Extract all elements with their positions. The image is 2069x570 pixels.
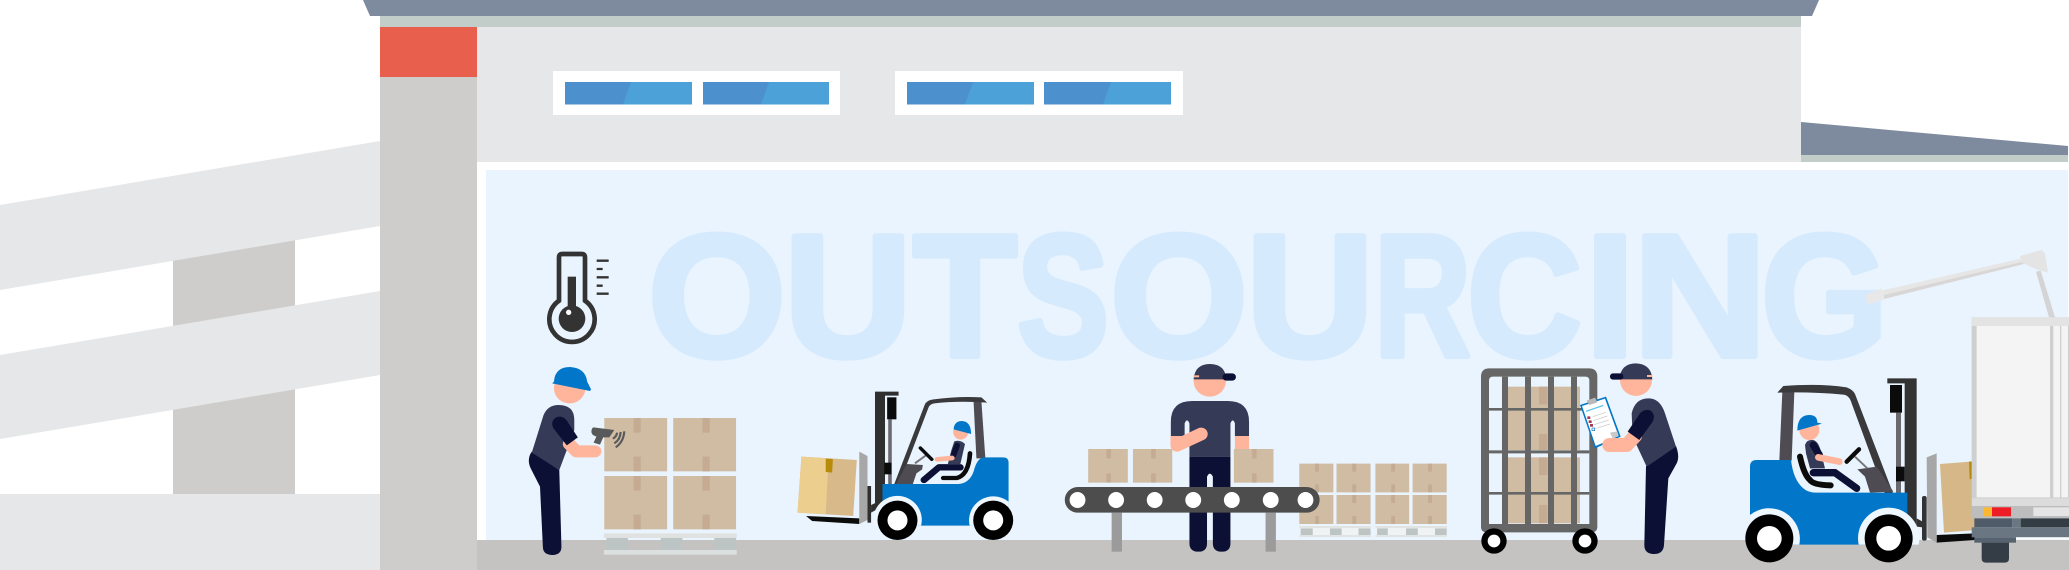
clipboard: [1580, 397, 1621, 448]
delivery truck rear: [1972, 317, 2069, 563]
red pillar cap: [380, 27, 477, 77]
cap: [1619, 363, 1652, 379]
frame: [1481, 368, 1597, 532]
torso: [532, 405, 574, 470]
cardboard box: [797, 457, 857, 516]
forearm: [569, 444, 595, 451]
hard hat: [552, 367, 591, 391]
side roof: [1801, 122, 2068, 155]
floor: [477, 540, 2069, 570]
legs: [1189, 457, 1230, 552]
worker with barcode scanner: [529, 367, 624, 555]
scanner: [591, 427, 624, 447]
title: OUTSOURCING: T: [913, 198, 1017, 393]
forklift carrying a box: [797, 392, 1013, 540]
conveyor worker: [1171, 364, 1249, 552]
mast: [1887, 378, 1917, 530]
title: OUTSOURCING: I: [1585, 198, 1635, 393]
cargo box: [1972, 317, 2069, 507]
left window: [553, 71, 840, 115]
sleeve: [1628, 410, 1654, 440]
main roof: [363, 0, 1819, 16]
cap: [1194, 364, 1226, 379]
title: OUTSOURCING: O: [648, 198, 786, 393]
stacked boxes on pallets: [1299, 464, 1447, 537]
boxes: [1508, 387, 1580, 523]
head: [1620, 364, 1652, 396]
wheels: [873, 496, 1013, 540]
title: OUTSOURCING: G: [1761, 198, 1888, 393]
casters: [1481, 528, 1598, 554]
forklift loading truck: [1745, 378, 1977, 562]
roll cage trolley with boxes: [1481, 368, 1598, 554]
mast: [875, 392, 899, 503]
boxes on conveyor: [1088, 449, 1273, 483]
title: OUTSOURCING: O: [1110, 198, 1248, 393]
body: [1750, 460, 1907, 545]
title: OUTSOURCING: N: [1633, 198, 1767, 393]
left ramp structure: [0, 141, 380, 570]
legs: [1644, 446, 1678, 554]
forearm: [1609, 436, 1635, 445]
interior background: [486, 170, 2068, 540]
worker with clipboard: [1580, 363, 1678, 554]
conveyor belt: [1065, 487, 1320, 552]
loading dock crane arm: [1865, 250, 2055, 318]
driver: [896, 421, 971, 484]
right window: [895, 71, 1183, 115]
pillar: [380, 77, 477, 570]
title: OUTSOURCING: C: [1467, 198, 1582, 393]
fork: [1937, 533, 1975, 543]
wheels: [1745, 508, 1919, 562]
pallet of boxes near scanner worker: [604, 418, 737, 555]
title: OUTSOURCING: S: [1017, 198, 1109, 393]
fork: [806, 516, 859, 524]
cab frame: [1779, 392, 1794, 461]
torso: [1632, 398, 1676, 467]
left arm: [1177, 434, 1201, 445]
right arm: [1235, 436, 1249, 451]
cab frame: [974, 402, 985, 458]
legs: [529, 452, 561, 555]
title: OUTSOURCING: U: [784, 198, 912, 393]
body: [882, 457, 1009, 526]
head: [554, 373, 585, 403]
head: [1194, 365, 1226, 397]
icon: thermometer: [549, 254, 609, 342]
sleeve: [552, 417, 578, 445]
cardboard box: [1940, 461, 1977, 533]
title: OUTSOURCING: U: [1246, 198, 1374, 393]
title: OUTSOURCING: R: [1374, 198, 1471, 393]
torso: [1171, 401, 1249, 457]
tail lights and bumper: [1972, 506, 2069, 563]
driver: [1797, 415, 1893, 493]
